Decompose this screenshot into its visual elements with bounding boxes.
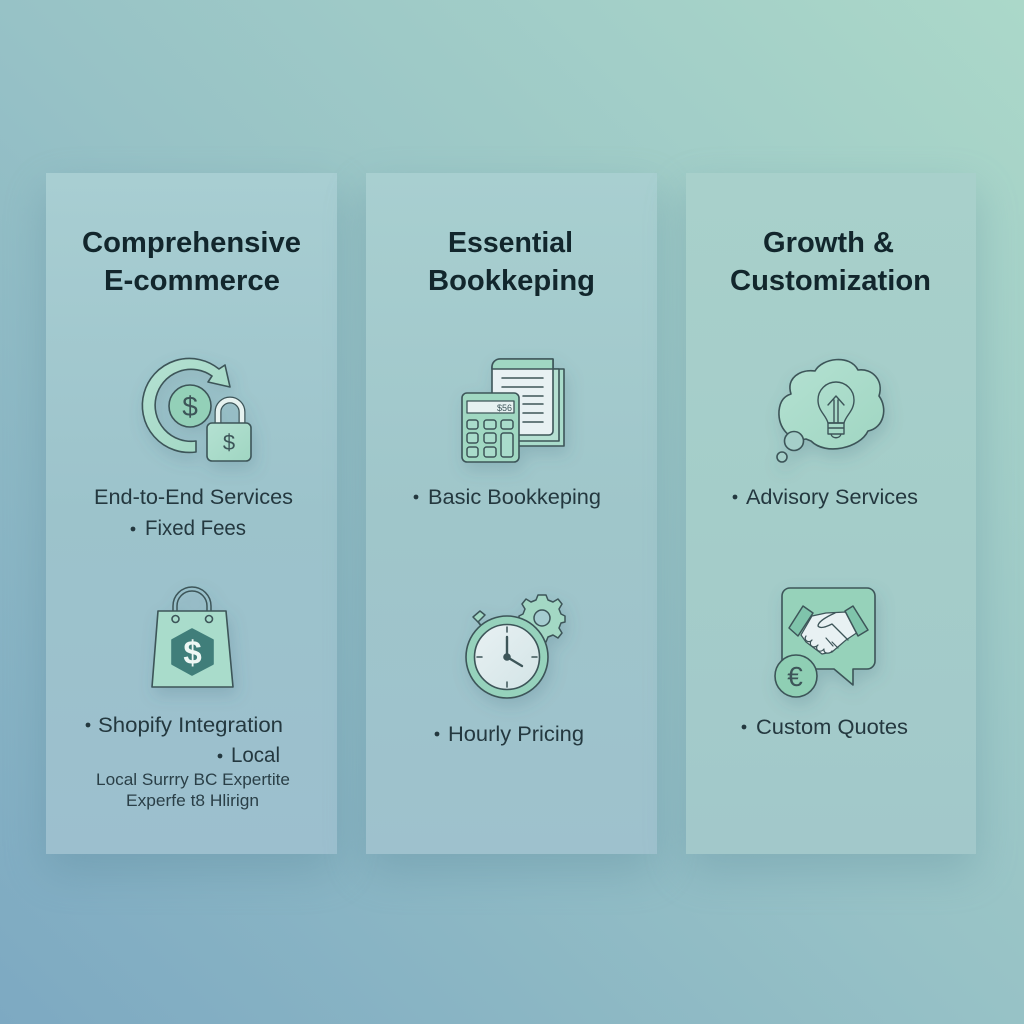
panel: essential bookkeeping bbox=[366, 173, 657, 871]
icon: handshake speech bubble with euro coin: € bbox=[787, 661, 803, 692]
panel: growth and customization bbox=[686, 173, 976, 871]
text: local surrey expertise: Local Surrry BC Expertite bbox=[96, 771, 290, 789]
bullet: shopify integration: Shopify Integration bbox=[98, 714, 283, 737]
icon: recurring dollar with lock: $ bbox=[182, 391, 198, 422]
text: end-to-end services: End-to-End Services bbox=[94, 486, 293, 509]
bullet: local: Local bbox=[231, 744, 280, 767]
bullet: fixed fees: Fixed Fees bbox=[145, 517, 246, 540]
heading: comprehensive e-commerce bbox=[82, 227, 301, 297]
heading: comprehensive e-commerce: Comprehensive bbox=[82, 227, 301, 259]
icon: shopping bag: $ bbox=[183, 634, 202, 671]
icon: thought cloud with light bulb bbox=[777, 360, 884, 462]
heading: essential bookkeeping: Bookkeping bbox=[428, 265, 595, 297]
icon: calculator and documents bbox=[462, 359, 564, 462]
bullet: hourly pricing: Hourly Pricing bbox=[448, 723, 584, 746]
heading: growth and customization: Customization bbox=[730, 265, 931, 297]
bullet: custom quotes: Custom Quotes bbox=[756, 716, 908, 739]
bullet: advisory services: Advisory Services bbox=[746, 486, 918, 509]
icon: stopwatch and gear bbox=[466, 595, 565, 698]
heading: comprehensive e-commerce: E-commerce bbox=[104, 265, 280, 297]
icon: recurring dollar with lock bbox=[142, 358, 251, 461]
heading: growth and customization bbox=[730, 227, 931, 297]
panel: comprehensive e-commerce bbox=[46, 173, 337, 871]
bullet: basic bookkeeping: Basic Bookkeping bbox=[428, 486, 601, 509]
heading: growth and customization: Growth & bbox=[763, 227, 894, 259]
icon: recurring dollar with lock: $ bbox=[223, 430, 235, 455]
heading: essential bookkeeping bbox=[428, 227, 595, 297]
icon: shopping bag bbox=[152, 589, 233, 687]
icon: calculator and documents: $56 bbox=[497, 403, 512, 413]
text: local surrey expertise bbox=[96, 771, 290, 810]
text: local surrey expertise: Experfe t8 Hlirign bbox=[126, 792, 259, 810]
heading: essential bookkeeping: Essential bbox=[448, 227, 573, 259]
icon: handshake speech bubble with euro coin bbox=[775, 588, 875, 697]
